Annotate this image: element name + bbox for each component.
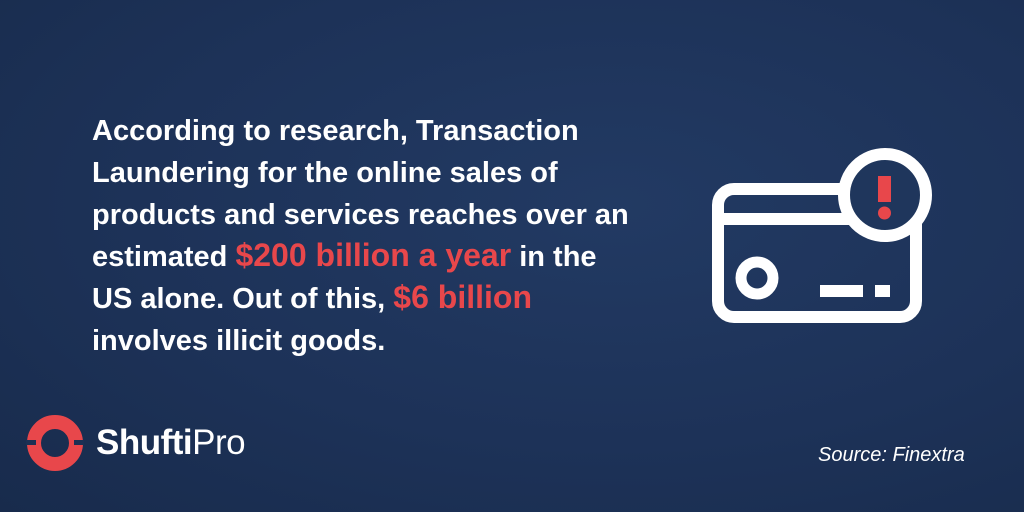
main statement text: estimated $200 billion a year in the bbox=[92, 237, 597, 273]
icon: credit card with alert bbox=[712, 148, 932, 323]
source note: Source: Finextra bbox=[818, 444, 965, 466]
main statement text: Laundering for the online sales of bbox=[92, 157, 558, 189]
main statement text: involves illicit goods. bbox=[92, 325, 385, 357]
main statement text: According to research, Transaction bbox=[92, 115, 579, 147]
main statement text: products and services reaches over an bbox=[92, 199, 629, 231]
logo: ShuftiPro: ShuftiPro bbox=[96, 423, 245, 462]
main statement text bbox=[92, 115, 629, 357]
main statement text: US alone. Out of this, $6 billion bbox=[92, 279, 532, 315]
logo: ShuftiPro bbox=[27, 415, 245, 471]
